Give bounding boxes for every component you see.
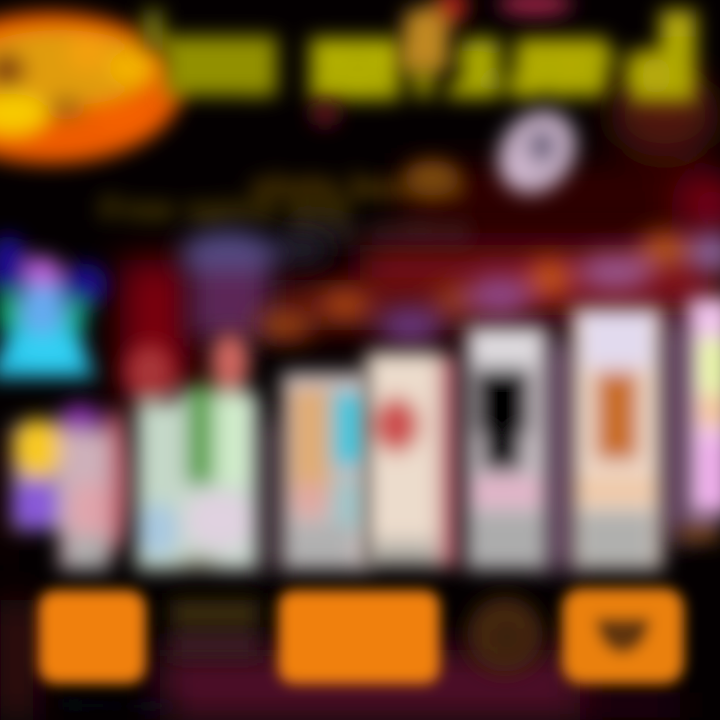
subtitle [100, 168, 470, 246]
slot card group 7 [680, 298, 720, 542]
red accent above title [311, 0, 573, 126]
purple glow shape [180, 231, 330, 338]
subtitle: play online [290, 215, 470, 246]
icon: white chip [482, 95, 592, 209]
button: left orange [38, 590, 146, 684]
orange highlight in subtitle [404, 160, 460, 196]
orange and purple tops above cards [257, 232, 720, 570]
button: centre orange [278, 590, 440, 684]
slot card group 4 [366, 352, 458, 567]
subtitle: Free spins and [100, 191, 350, 227]
title: wizard [309, 22, 695, 116]
title: ins [165, 24, 275, 113]
slot card group 3 [282, 372, 368, 570]
button: right orange with chevron [562, 588, 684, 684]
title [143, 10, 696, 116]
slot card group 2 [126, 332, 258, 570]
footer text: Terms apply [55, 692, 185, 717]
icon: blue green triangle [0, 235, 108, 378]
slot card group 5 [466, 326, 548, 570]
logo: orange oval badge [0, 12, 182, 164]
slot card group 6 [572, 308, 662, 570]
button: dark list [170, 600, 260, 656]
subtitle: slots bonus [250, 168, 465, 206]
slot card group 1 [11, 404, 131, 570]
button: dark circle [467, 596, 543, 672]
